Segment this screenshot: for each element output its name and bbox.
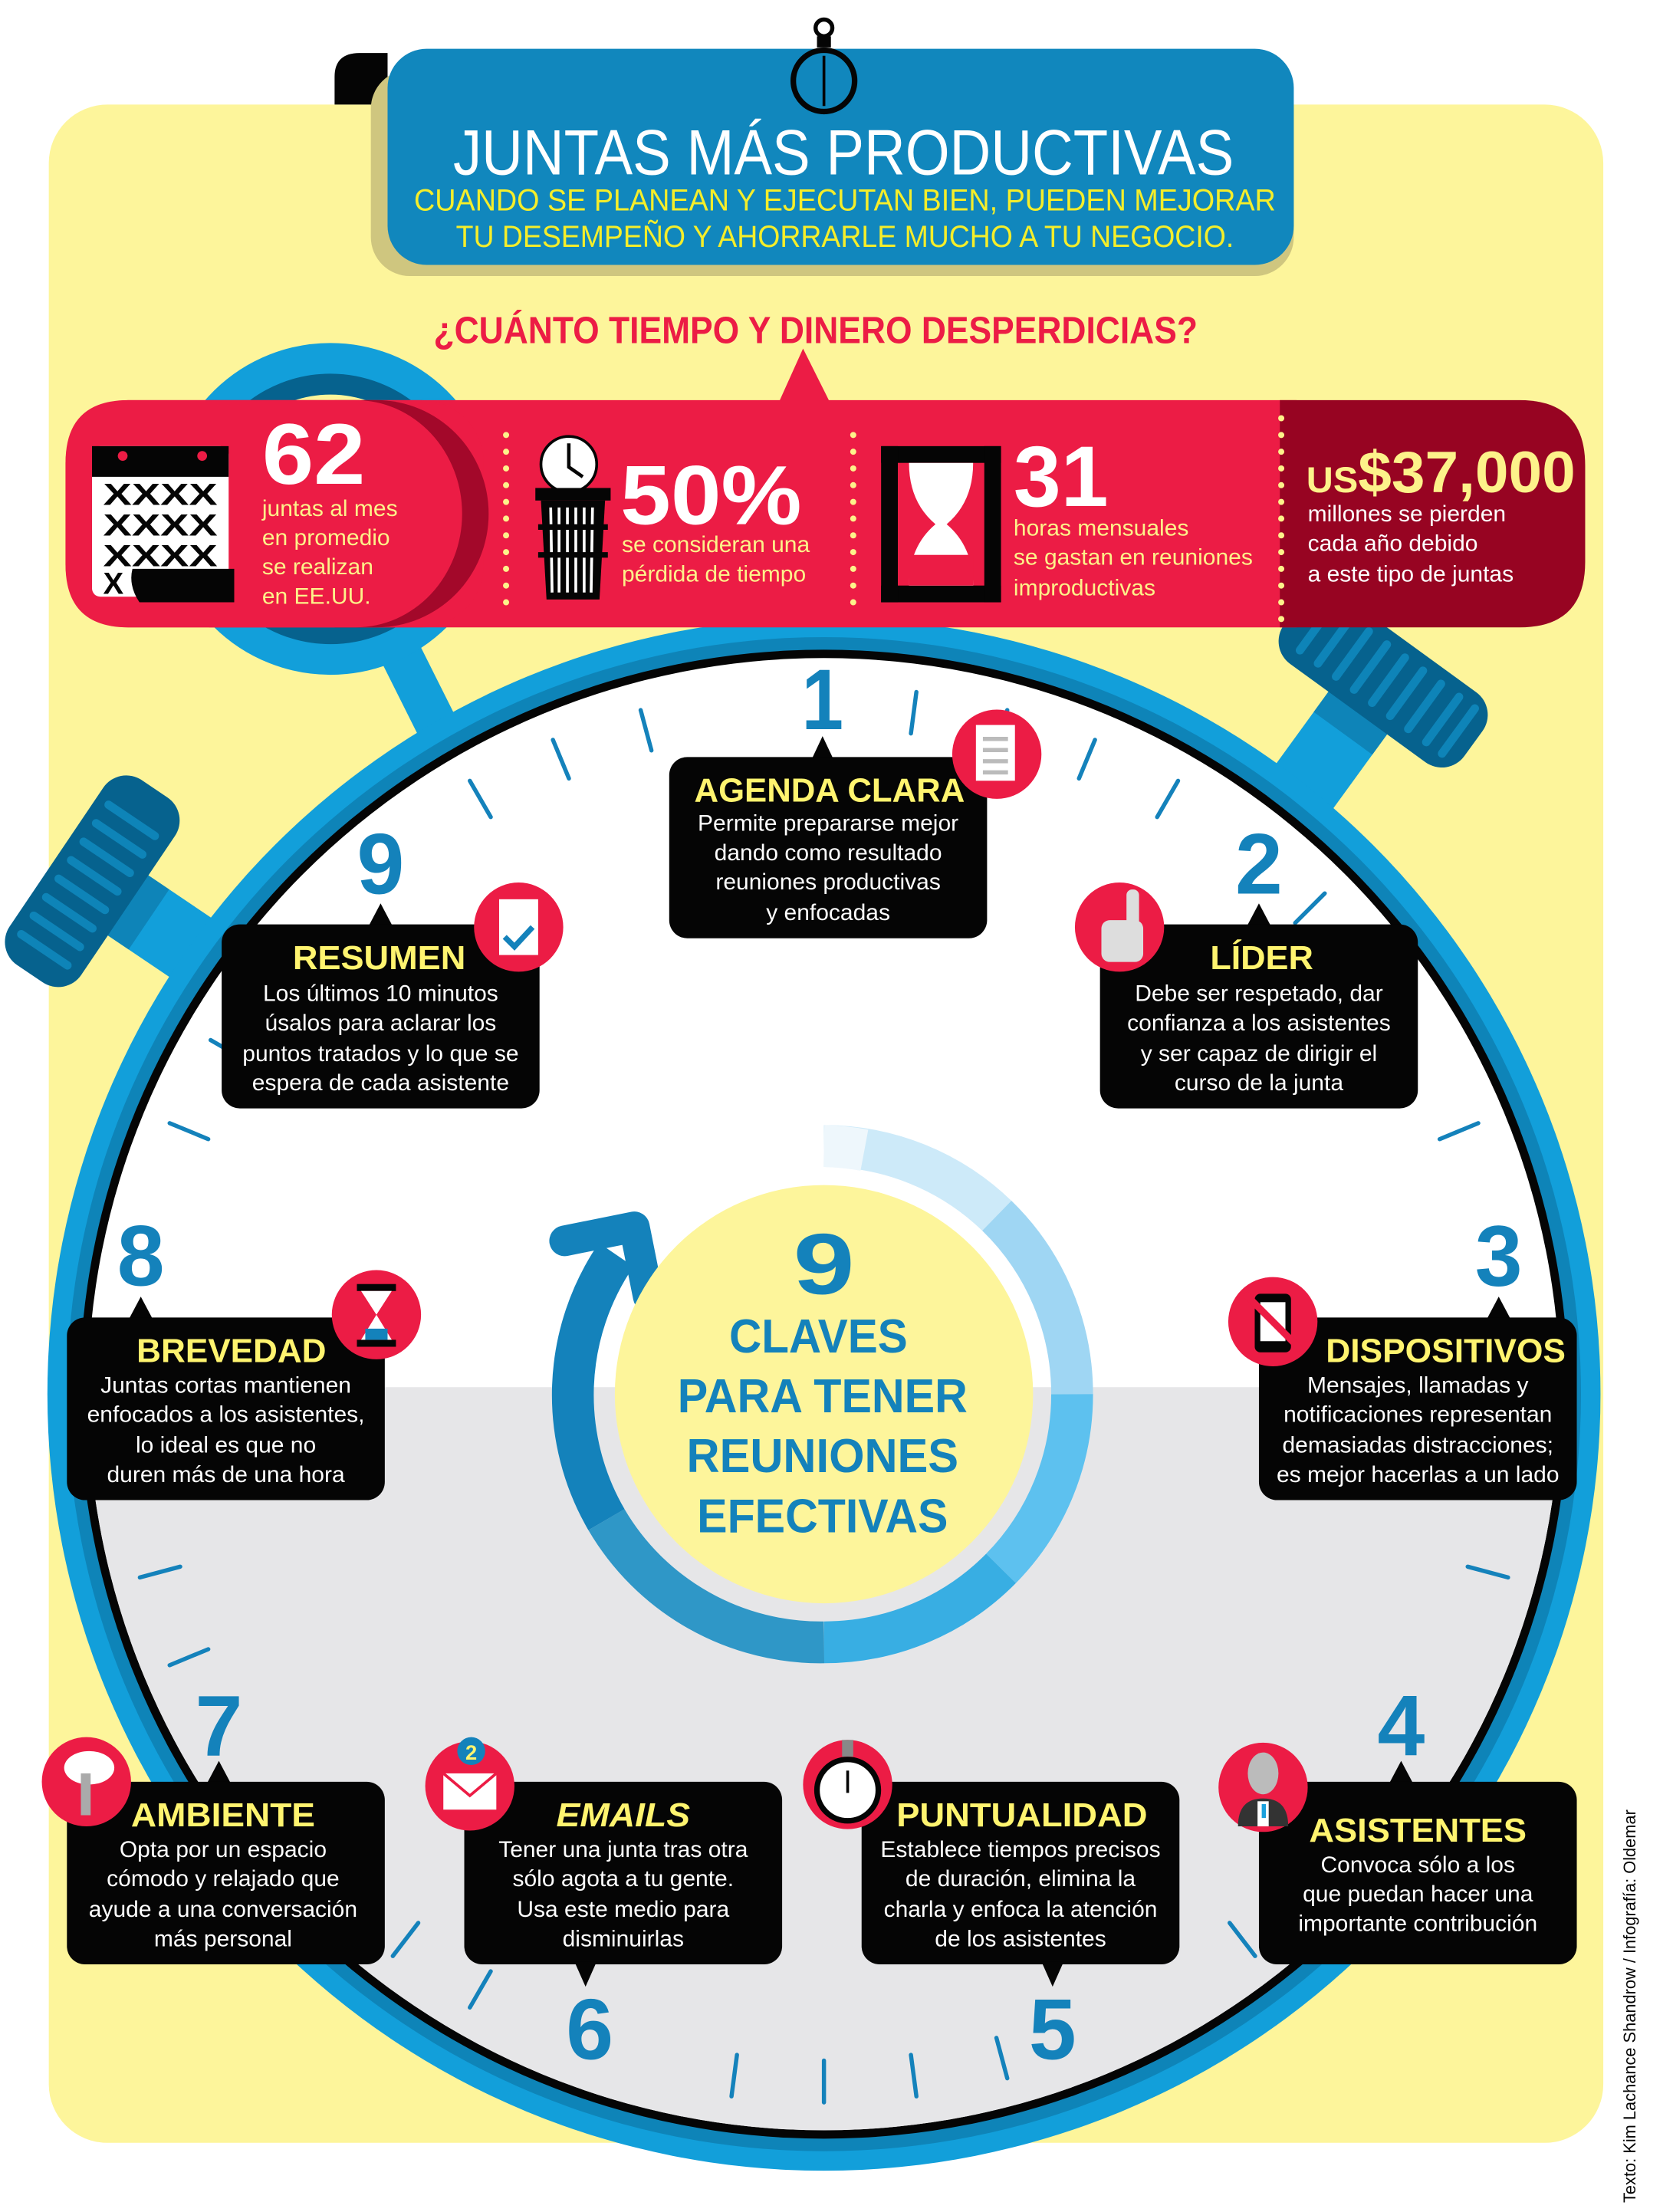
stats band [65, 349, 1585, 627]
icon: calendar: XXXX [104, 478, 218, 511]
callout 7: ambiente: Opta por un espacio [120, 1837, 327, 1862]
callout 3: dispositivos: es mejor hacerlas a un lado [1277, 1462, 1560, 1487]
stat 50%: 50% [620, 449, 802, 543]
callout 3: dispositivos: DISPOSITIVOS [1326, 1333, 1566, 1370]
icon: calendar: XXXX [104, 508, 218, 542]
stat 37000 [1307, 440, 1576, 587]
stat 50% [620, 449, 810, 587]
center disc: CLAVES [729, 1310, 908, 1363]
callout 4: asistentes: ASISTENTES [1309, 1812, 1527, 1849]
callout 5: puntualidad [803, 1740, 1179, 2078]
callout 4: asistentes: que puedan hacer una [1303, 1882, 1533, 1907]
callout 8: brevedad: Juntas cortas mantienen [100, 1373, 351, 1399]
callout 1: agenda clara: Permite prepararse mejor [698, 811, 958, 836]
callout 9: resumen: úsalos para aclarar los [265, 1011, 496, 1036]
stat 31 [1014, 428, 1253, 600]
stat 62: se realizan [262, 554, 373, 580]
icon: calendar: XXXX [104, 539, 218, 573]
callout 3: dispositivos: notificaciones representan [1284, 1402, 1552, 1428]
center disc: 9 [794, 1215, 855, 1312]
callout 8: brevedad: lo ideal es que no [136, 1433, 316, 1458]
callout 9: resumen: espera de cada asistente [252, 1070, 509, 1096]
icon: stopwatch top [794, 19, 855, 111]
callout 3: dispositivos: Mensajes, llamadas y [1307, 1373, 1528, 1399]
callout 8: brevedad: 8 [117, 1208, 165, 1304]
icon: envelope: 2 [465, 1740, 477, 1764]
title banner: TU DESEMPEÑO Y AHORRARLE MUCHO A TU NEGOCIO. [456, 219, 1234, 254]
left knob [0, 764, 290, 1065]
callout 7: ambiente: AMBIENTE [131, 1796, 315, 1834]
question heading: ¿CUÁNTO TIEMPO Y DINERO DESPERDICIAS? [434, 308, 1198, 351]
callout 6: emails [426, 1737, 782, 2078]
stat 62 [261, 406, 398, 609]
callout 1: agenda clara: dando como resultado [715, 840, 942, 866]
callout 4: asistentes: 4 [1378, 1677, 1425, 1773]
tick marks [122, 692, 1532, 2102]
callout 9: resumen: puntos tratados y lo que se [242, 1041, 519, 1067]
callout 9: resumen: 9 [357, 816, 404, 912]
callout 2: lider: y ser capaz de dirigir el [1141, 1041, 1377, 1067]
center ring [573, 1146, 1072, 1642]
stat 62: en EE.UU. [262, 583, 371, 609]
icon: hand [1075, 882, 1164, 971]
callout 2: lider: 2 [1235, 816, 1283, 912]
callout 7: ambiente: ayude a una conversación [89, 1897, 357, 1922]
callout 4: asistentes [1218, 1677, 1577, 1964]
stat 31: horas mensuales [1014, 515, 1188, 541]
callout 6: emails: EMAILS [557, 1796, 690, 1834]
stat 37000: millones se pierden [1308, 501, 1506, 527]
callout 7: ambiente: más personal [154, 1926, 292, 1951]
callout 3: dispositivos: 3 [1475, 1208, 1523, 1304]
icon: calendar [92, 446, 234, 603]
callout 9: resumen: RESUMEN [293, 939, 465, 977]
icon: checklist [474, 882, 564, 971]
callout 7: ambiente [42, 1677, 385, 1964]
callout 2: lider: confianza a los asistentes [1127, 1011, 1391, 1036]
clock body [48, 618, 1603, 2171]
icon: envelope [426, 1737, 514, 1830]
icon: hourglass [881, 446, 1001, 603]
title banner [334, 49, 1293, 276]
title: JUNTAS MÁS PRODUCTIVAS [453, 116, 1234, 188]
callout 1: agenda clara: reuniones productivas [715, 869, 941, 895]
center disc [615, 1185, 1033, 1603]
callout 6: emails: disminuirlas [563, 1926, 684, 1951]
callout 5: puntualidad: de los asistentes [935, 1926, 1106, 1951]
icon: stopwatch [803, 1740, 892, 1829]
callout 5: puntualidad: charla y enfoca la atención [884, 1897, 1157, 1922]
subtitle: CUANDO SE PLANEAN Y EJECUTAN BIEN, PUEDEN MEJORAR [414, 184, 1276, 218]
callout 3: dispositivos: demasiadas distracciones; [1282, 1433, 1553, 1458]
callout 9: resumen: Los últimos 10 minutos [263, 981, 498, 1007]
callout 7: ambiente: 7 [196, 1677, 242, 1773]
callout 9: resumen [222, 816, 564, 1109]
right knob [1205, 577, 1499, 864]
stat 37000: US$37,000 [1307, 440, 1576, 505]
callout 2: lider: LÍDER [1210, 938, 1313, 977]
center disc: EFECTIVAS [697, 1490, 948, 1543]
callout 1: agenda clara: 1 [802, 651, 843, 748]
stat 31: 31 [1014, 428, 1109, 524]
icon: clock trash [535, 436, 610, 600]
callout 2: lider [1075, 816, 1418, 1109]
callout 7: ambiente: cómodo y relajado que [107, 1866, 340, 1892]
callout 2: lider: Debe ser respetado, dar [1135, 981, 1383, 1007]
stat 62: en promedio [262, 525, 390, 551]
icon: tree [42, 1737, 131, 1826]
stat 31: se gastan en reuniones [1014, 544, 1253, 570]
stat 37000: cada año debido [1308, 531, 1477, 556]
center disc: PARA TENER [678, 1370, 968, 1423]
icon: no phone [1228, 1277, 1317, 1366]
arrow [564, 1227, 649, 1297]
callout 2: lider: curso de la junta [1175, 1070, 1343, 1096]
stat 37000: a este tipo de juntas [1308, 561, 1514, 587]
stat 62: juntas al mes [261, 496, 398, 521]
callout 3: dispositivos [1228, 1208, 1577, 1500]
callout 5: puntualidad: de duración, elimina la [906, 1866, 1136, 1892]
callout 1: agenda clara [669, 651, 1041, 938]
callout 5: puntualidad: 5 [1029, 1981, 1076, 2078]
callout 1: agenda clara: y enfocadas [766, 900, 890, 925]
callout 8: brevedad: duren más de una hora [107, 1462, 345, 1487]
callout 5: puntualidad: PUNTUALIDAD [896, 1796, 1147, 1834]
stat 50%: se consideran una [622, 532, 810, 557]
callout 8: brevedad: BREVEDAD [136, 1333, 326, 1370]
center disc: REUNIONES [687, 1430, 958, 1483]
credit: Texto: Kim Lachance Shandrow / Infografía: Oldemar [1620, 1809, 1639, 2203]
icon: document [952, 710, 1041, 799]
callout 4: asistentes: Convoca sólo a los [1321, 1852, 1515, 1878]
callout 6: emails: Usa este medio para [517, 1897, 730, 1922]
callout 4: asistentes: importante contribución [1298, 1911, 1537, 1936]
stat 31: improductivas [1014, 575, 1155, 600]
icon: person [1218, 1743, 1308, 1832]
callout 1: agenda clara: AGENDA CLARA [695, 772, 965, 810]
callout 5: puntualidad: Establece tiempos precisos [880, 1837, 1161, 1862]
callout 8: brevedad [67, 1208, 421, 1500]
callout 6: emails: 6 [566, 1981, 613, 2078]
icon: small hourglass [332, 1270, 421, 1359]
stat 50%: pérdida de tiempo [622, 561, 806, 587]
callout 6: emails: Tener una junta tras otra [498, 1837, 748, 1862]
callout 6: emails: sólo agota a tu gente. [513, 1866, 734, 1892]
callout 8: brevedad: enfocados a los asistentes, [87, 1402, 365, 1428]
crown ring behind stats [180, 358, 481, 739]
stat 62: 62 [262, 406, 365, 502]
icon: calendar: X [104, 567, 124, 601]
